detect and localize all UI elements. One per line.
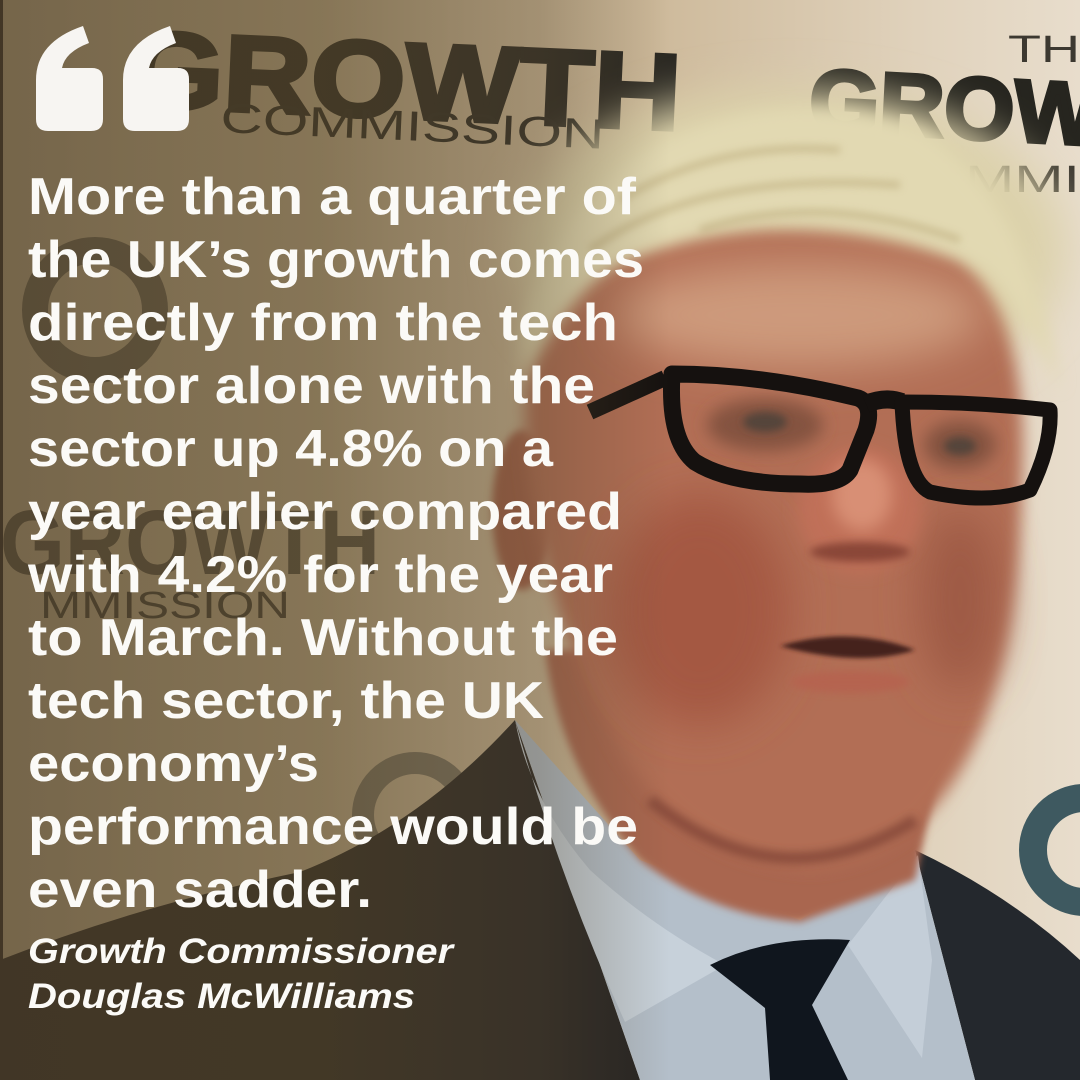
face (525, 230, 1023, 868)
backdrop logo: Growth Commission left: GROWTH (127, 8, 684, 153)
backdrop logo: lower left: MMISSION (40, 585, 290, 627)
left collar (515, 720, 725, 1022)
quote text: directly from the tech (28, 294, 618, 352)
icon: quotation mark (36, 26, 189, 131)
cheek redness (610, 495, 790, 725)
backdrop logo: lower left: GROWTH (0, 492, 380, 594)
quote text: sector up 4.8% on a (28, 420, 554, 478)
hair back (515, 90, 1065, 410)
quote text (27, 168, 644, 919)
backdrop logo: Growth Commission left: COMMISSION (220, 94, 605, 158)
attribution (28, 932, 456, 1016)
backdrop logo: Growth Commission right (807, 29, 1080, 201)
backdrop logo: Growth Commission right: MMI (965, 159, 1080, 201)
right jacket (915, 850, 1080, 1080)
mouth (780, 636, 915, 658)
nose (798, 448, 922, 572)
quote text: sector alone with the (28, 357, 595, 415)
hair streaks (590, 149, 960, 250)
quote text: economy’s (28, 735, 319, 793)
quote text: to March. Without the (28, 609, 618, 667)
backdrop logo ring: lower right (1033, 798, 1080, 902)
left jacket (0, 720, 640, 1080)
quote text: year earlier compared (28, 483, 622, 541)
quote text: the UK’s growth comes (28, 231, 644, 289)
icon: glasses (590, 374, 1050, 498)
forehead highlight (615, 263, 985, 367)
ear (492, 430, 552, 590)
hair front (520, 109, 1060, 390)
attribution: Growth Commissioner (28, 932, 456, 971)
attribution: Douglas McWilliams (28, 977, 415, 1016)
right collar (848, 855, 932, 1058)
quote text: with 4.2% for the year (27, 546, 613, 604)
tie (710, 939, 850, 1080)
backdrop logo: lower left (0, 250, 467, 867)
neck (545, 650, 965, 922)
quote text: even sadder. (28, 861, 372, 919)
quote text: performance would be (28, 798, 638, 856)
backdrop logo: Growth Commission right: TH (1008, 29, 1080, 71)
quote text: tech sector, the UK (28, 672, 544, 730)
jaw shadow (650, 800, 915, 858)
eye sockets (707, 399, 823, 451)
quote text: More than a quarter of (28, 168, 637, 226)
shirt (515, 720, 975, 1080)
